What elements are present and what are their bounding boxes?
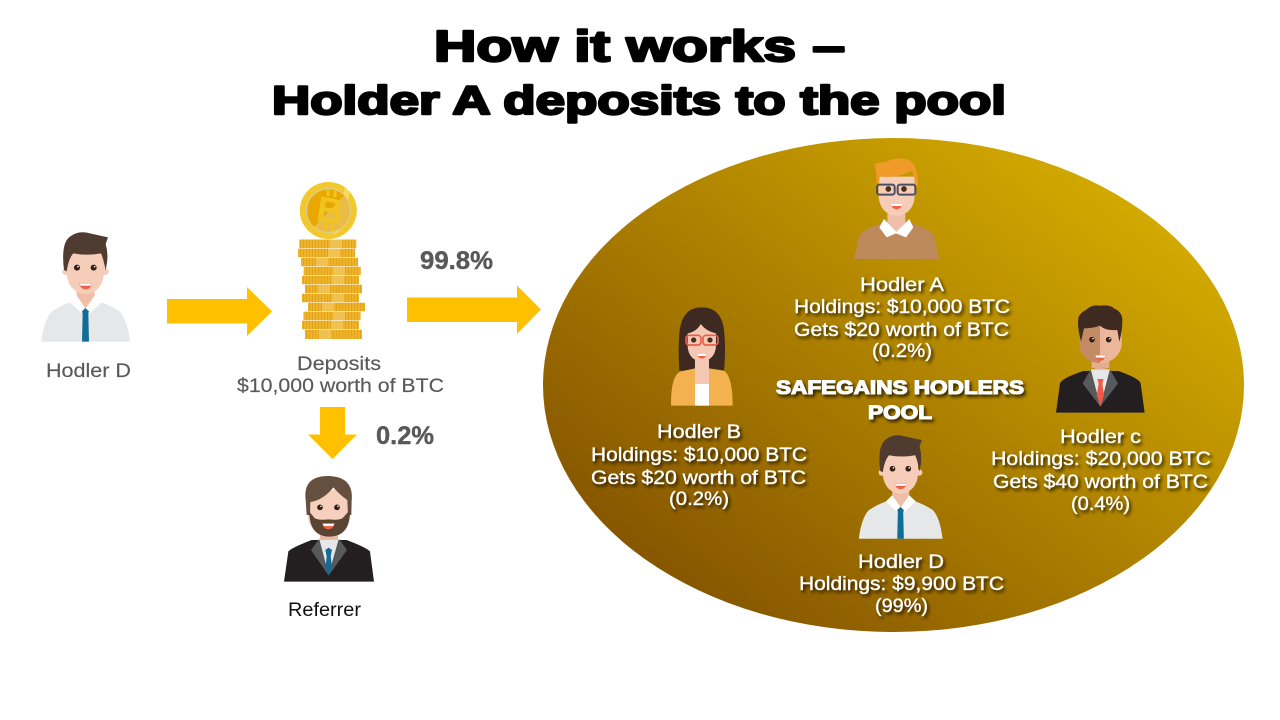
text: hodler A details [794, 275, 1010, 362]
text: hodler C details: Hodler c [1060, 427, 1141, 448]
text: hodler B details: Hodler B [657, 422, 741, 443]
icon: hodler B [671, 307, 733, 406]
text: hodler A details: Hodler A [860, 275, 944, 296]
icon: hodler D depositor [41, 232, 130, 342]
label: deposits: Deposits [297, 354, 381, 375]
text: hodler C details: (0.4%) [1071, 494, 1130, 515]
icon: bitcoin coin stack [296, 182, 366, 339]
icon: bitcoin coin stack: B [314, 188, 346, 233]
text: hodler C details [991, 427, 1211, 515]
icon: hodler A [854, 159, 939, 259]
text: hodler A details: (0.2%) [872, 341, 932, 362]
text: hodler C details: Gets $40 worth of BTC [993, 472, 1208, 493]
label: 0.2 percent: 0.2% [376, 422, 434, 450]
text: hodler D details [799, 552, 1004, 617]
title: Holder A deposits to the pool [272, 79, 1006, 123]
heading: safegains hodlers pool [776, 378, 1024, 424]
label: 99.8 percent: 99.8% [420, 247, 493, 275]
text: hodler B details: Holdings: $10,000 BTC [591, 445, 807, 466]
label: deposits [237, 354, 444, 397]
icon: hodler C [1056, 305, 1145, 413]
heading: safegains hodlers pool: SAFEGAINS HODLERS [776, 378, 1024, 399]
icon: referrer [284, 476, 374, 582]
heading: safegains hodlers pool: POOL [868, 403, 932, 424]
text: hodler C details: Holdings: $20,000 BTC [991, 449, 1211, 470]
text: hodler A details: Holdings: $10,000 BTC [794, 297, 1010, 318]
arrow: deposits to referrer [308, 407, 357, 459]
label: deposits: $10,000 worth of BTC [237, 376, 444, 397]
text: hodler B details [591, 422, 807, 510]
label: referrer: Referrer [288, 600, 362, 621]
text: hodler D details: (99%) [875, 596, 928, 617]
text: hodler D details: Holdings: $9,900 BTC [799, 574, 1004, 595]
icon: hodler D in pool [859, 435, 943, 539]
arrow: hodler D to deposits [167, 287, 272, 336]
panel: hodlers pool ellipse [543, 138, 1244, 632]
text: hodler B details: Gets $20 worth of BTC [591, 468, 806, 489]
arrow: deposits to pool [407, 286, 541, 334]
text: hodler A details: Gets $20 worth of BTC [794, 320, 1009, 341]
text: hodler D details: Hodler D [858, 552, 944, 573]
label: hodler D: Hodler D [46, 361, 131, 382]
title: How it works – [434, 22, 845, 71]
title [272, 22, 1006, 123]
text: hodler B details: (0.2%) [669, 489, 729, 510]
